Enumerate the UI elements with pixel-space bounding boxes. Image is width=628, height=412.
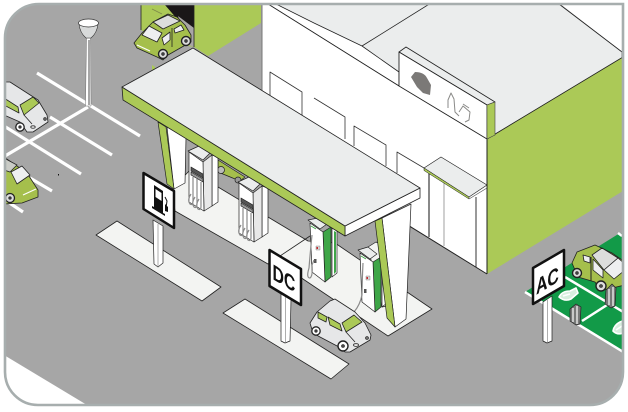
main building — [262, 3, 623, 274]
post — [281, 293, 291, 343]
icon: fuel pump — [152, 185, 165, 216]
label DC: DC — [272, 261, 296, 298]
panel — [533, 250, 564, 304]
green car at back building — [134, 14, 191, 60]
entrance awning and doors — [424, 157, 487, 267]
canopy pillar right — [375, 204, 411, 327]
fuel pump 2 — [238, 177, 268, 242]
pump island pad — [172, 170, 432, 336]
DC sign — [270, 250, 301, 343]
parking bay lines — [4, 73, 140, 212]
AC charger left — [570, 304, 581, 325]
label AC: AC — [536, 263, 559, 300]
green car left — [4, 157, 38, 204]
icon: cup — [411, 72, 431, 95]
fuel pump 1 — [188, 146, 218, 211]
windows — [270, 72, 424, 173]
icon: bottle and fruit — [448, 93, 470, 122]
green back building with doorway — [141, 3, 261, 72]
white pavement corner bottom left — [6, 356, 85, 404]
canopy pillar left — [158, 122, 186, 189]
panel — [270, 250, 301, 305]
EV charger 2 with cable to car — [354, 242, 386, 312]
shop sign with cup and bottle icons — [399, 47, 495, 139]
post — [153, 220, 163, 267]
green car in AC bay — [572, 245, 625, 291]
lamp post — [78, 19, 98, 106]
bay lines — [525, 233, 625, 353]
canopy roof — [122, 48, 420, 236]
AC sign — [533, 250, 564, 343]
AC charger right — [605, 284, 616, 308]
small mark on asphalt — [58, 174, 59, 176]
building roof — [262, 3, 622, 139]
post — [543, 296, 552, 343]
pad joint line — [268, 236, 310, 264]
white car left — [4, 82, 48, 132]
fuel sign — [144, 173, 174, 267]
gable front — [268, 4, 399, 86]
white car at charger — [310, 299, 371, 352]
icon: bay car symbol — [559, 288, 578, 300]
AC charging bays — [525, 233, 625, 353]
white front wall — [262, 3, 487, 274]
green side wall — [487, 57, 623, 274]
EV charger 1 — [308, 218, 337, 282]
car behind pumps — [218, 160, 245, 183]
icon: bay car symbol right — [612, 320, 622, 335]
sign pad centre — [223, 299, 349, 379]
white sky corner top right — [562, 5, 622, 52]
panel — [144, 173, 174, 228]
sign pad left — [96, 221, 221, 301]
